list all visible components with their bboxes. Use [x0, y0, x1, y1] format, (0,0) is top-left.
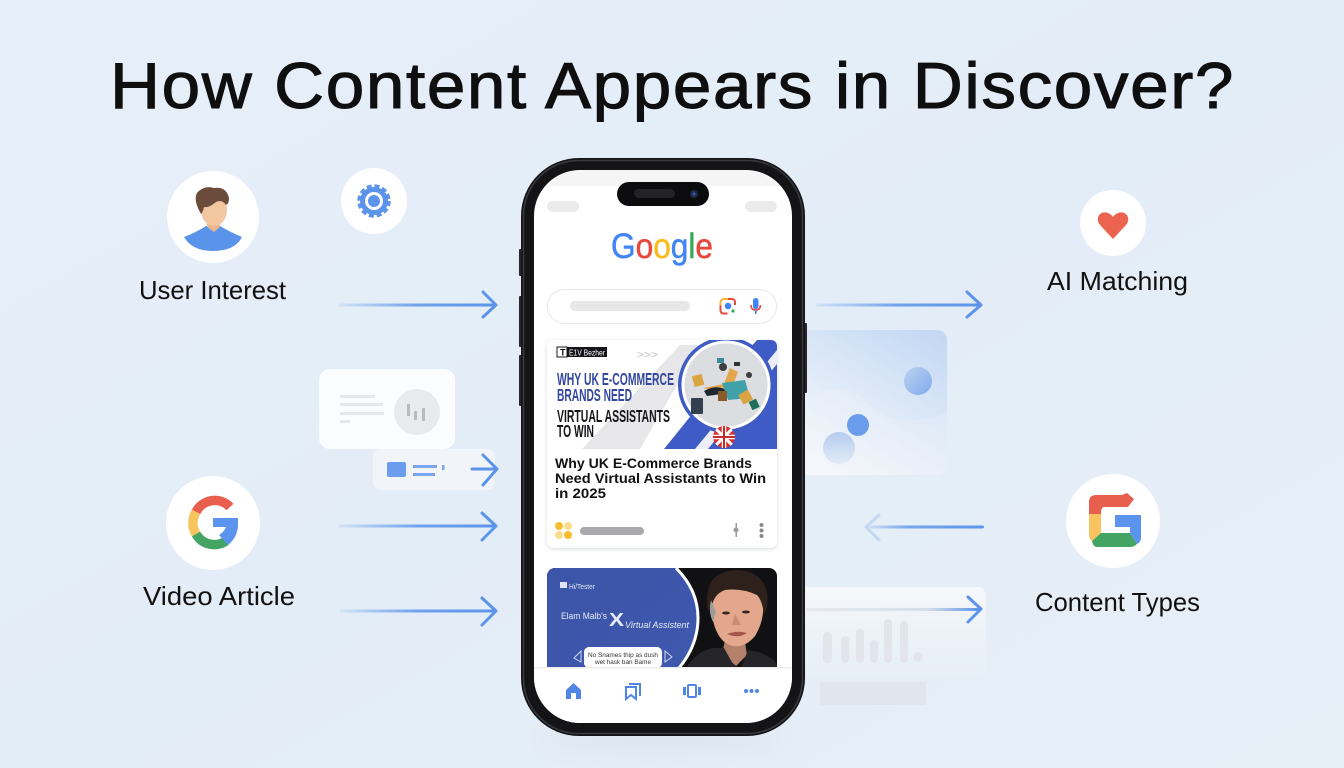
floating panel: blue gradient card [800, 330, 947, 475]
phone side buttons [519, 249, 807, 406]
second thumbnail callout [574, 647, 672, 668]
thumbnail: VIRTUAL ASSISTANTS [557, 406, 670, 426]
infographic canvas [115, 60, 1232, 736]
second thumbnail headline: X [609, 610, 624, 630]
bottom navigation [534, 667, 792, 723]
card footer [555, 522, 764, 539]
article card 1 [547, 337, 777, 548]
second thumbnail headline [562, 612, 690, 628]
thumbnail headline: WHY UK E-COMMERCE [557, 369, 674, 389]
arrow: user interest to phone [339, 292, 496, 317]
thumbnail logo: E1V Bezher [569, 348, 605, 358]
second thumbnail headline: Virtual Assistent [625, 620, 689, 631]
article headline [555, 455, 766, 501]
icon: microphone [751, 298, 760, 314]
article headline: Need Virtual Assistants to Win [555, 470, 766, 486]
floating panel: faded bar chart with arrow [800, 587, 986, 705]
node: User Interest [139, 171, 287, 305]
thumbnail logo [557, 347, 607, 358]
label: User Interest: User Interest [139, 275, 287, 305]
icon: more dots [744, 689, 759, 693]
arrow: content types to phone [866, 515, 984, 540]
Google logo: Google [611, 227, 713, 266]
icon: blocky Google G [1066, 474, 1160, 568]
phone screen [534, 170, 792, 723]
second thumbnail headline: Elam Malb's [561, 611, 607, 622]
arrow: phone to AI matching [816, 292, 981, 317]
arrow: video article lower [340, 598, 496, 625]
thumbnail logo: T [560, 348, 566, 358]
label: Video Article: Video Article [143, 581, 295, 611]
node: AI Matching [1047, 190, 1188, 296]
article headline: in 2025 [555, 485, 606, 501]
floating panel: text card [319, 369, 455, 449]
label: AI Matching: AI Matching [1047, 266, 1188, 296]
icon: user avatar [167, 171, 259, 263]
thumbnail: BRANDS NEED [557, 385, 632, 405]
icon: heart [1080, 190, 1146, 256]
phone [519, 158, 807, 736]
icon: gear [341, 168, 407, 234]
search bar [548, 290, 776, 324]
portrait [686, 570, 777, 668]
node: Video Article [143, 476, 295, 611]
icon: bookmarks [626, 684, 640, 699]
status pills [547, 201, 777, 212]
label: Content Types: Content Types [1035, 587, 1200, 617]
floating panel: blue chip card with arrow [373, 449, 497, 490]
phone body [521, 158, 805, 736]
second thumbnail logo [560, 582, 595, 589]
node: Content Types [1035, 474, 1200, 617]
second thumbnail logo: Hi/Tester [569, 584, 596, 591]
article headline: Why UK E-Commerce Brands [555, 455, 752, 471]
soft phone shadow [543, 730, 783, 746]
icon: lens [720, 299, 735, 314]
thumbnail [547, 337, 777, 449]
icon: carousel [683, 685, 701, 697]
icon: Google G [166, 476, 260, 570]
thumbnail: TO WIN [557, 421, 594, 441]
person illustration [691, 358, 760, 414]
second thumbnail callout: No Snames thip as dush [588, 652, 658, 659]
thumbnail: >>> [637, 350, 658, 361]
second thumbnail callout: wet hask ban Bame [594, 659, 651, 666]
article card 2 [547, 568, 777, 668]
icon: home [566, 683, 581, 699]
title: How Content Appears in Discover? [110, 49, 1235, 122]
UK flag [713, 426, 735, 448]
notch [617, 182, 709, 206]
arrow: video article upper [339, 513, 496, 540]
